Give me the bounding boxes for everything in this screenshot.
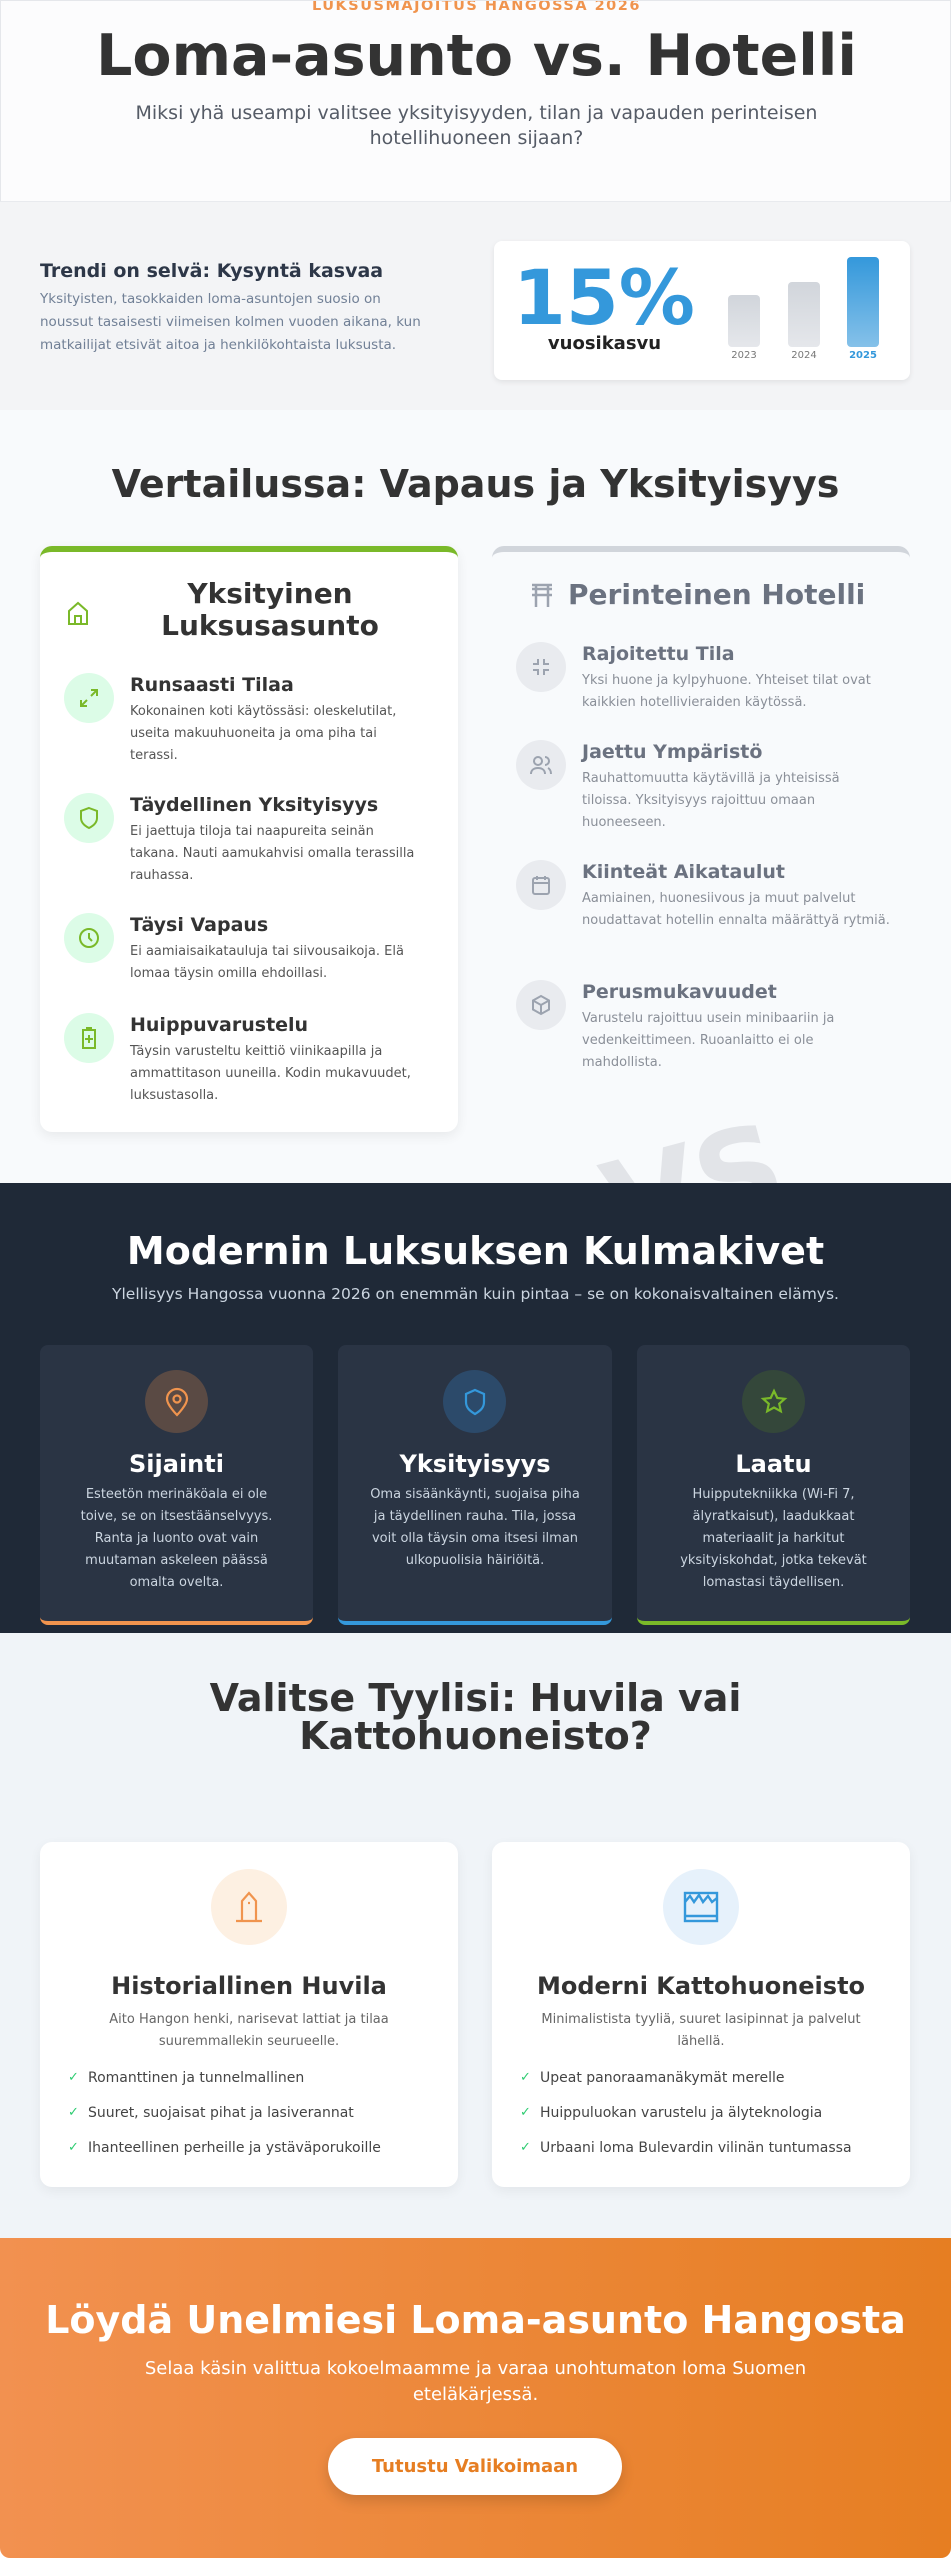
item: schedules: Kiinteät Aikataulut	[582, 861, 785, 883]
item: freedom	[64, 913, 404, 981]
header section	[0, 0, 951, 202]
dark section: cornerstones	[0, 1183, 951, 1633]
CTA text: Selaa käsin valittua kokoelmaamme ja varaa unohtumaton loma Suomen eteläkärjessä.	[145, 2358, 806, 2405]
CTA button	[328, 2438, 622, 2495]
checklist: ✓	[68, 2070, 79, 2085]
checklist	[520, 2070, 852, 2156]
section title: Vertailussa: Vapaus ja Yksityisyys	[112, 462, 839, 506]
panel title with icon: Perinteinen Hotelli	[568, 578, 865, 611]
CTA section	[0, 2238, 951, 2558]
item: freedom: Täysi Vapaus	[130, 914, 268, 936]
checklist: Urbaani loma Bulevardin vilinän tuntumassa	[540, 2140, 852, 2156]
bar chart: 2023	[731, 350, 757, 361]
checklist: ✓	[520, 2105, 531, 2120]
checklist: ✓	[520, 2070, 531, 2085]
icon: window	[663, 1869, 739, 1945]
item: equipment: Täysin varusteltu keittiö viinikaapilla ja ammattitason uuneilla. Kodin mukavuudet, luksustasolla.	[130, 1044, 411, 1103]
trend text: Trendi on selvä: Kysyntä kasvaa	[40, 260, 383, 282]
bar chart: 2024	[791, 350, 817, 361]
card: historic villa	[40, 1842, 458, 2187]
card: privacy: Yksityisyys	[399, 1450, 551, 1478]
card: penthouse: Minimalistista tyyliä, suuret lasipinnat ja palvelut lähellä.	[541, 2012, 861, 2049]
item: freedom: Ei aamiaisaikatauluja tai siivousaikoja. Elä lomaa täysin omilla ehdoillasi.	[130, 944, 404, 981]
card: quality	[637, 1345, 910, 1625]
item: schedules	[516, 860, 890, 928]
item: limited space: Yksi huone ja kylpyhuone. Yhteiset tilat ovat kaikkien hotellivieraiden käytössä.	[582, 673, 871, 710]
checklist: Upeat panoraamanäkymät merelle	[540, 2070, 785, 2086]
checklist	[68, 2070, 381, 2156]
card: privacy: Oma sisäänkäynti, suojaisa piha ja täydellinen rauha. Tila, jossa voit olla täysin oma itsesi ilman ulkopuolisia häiriöitä.	[370, 1487, 580, 1568]
item: basic amenities: Varustelu rajoittuu usein minibaariin ja vedenkeittimeen. Ruoanlaitto ei ole mahdollista.	[582, 1011, 834, 1070]
stat label: vuosikasvu	[548, 333, 661, 354]
checklist: Ihanteellinen perheille ja ystäväporukoille	[88, 2140, 381, 2156]
section subtitle: Ylellisyys Hangossa vuonna 2026 on enemmän kuin pintaa – se on kokonaisvaltainen elämys.	[112, 1285, 839, 1303]
card: location	[40, 1345, 313, 1625]
item: privacy: Ei jaettuja tiloja tai naapureita seinän takana. Nauti aamukahvisi omalla terassilla rauhassa.	[130, 824, 414, 883]
icon: tower	[211, 1869, 287, 1945]
trend text	[40, 260, 421, 353]
trend text: Yksityisten, tasokkaiden loma-asuntojen suosio on noussut tasaisesti viimeisen kolmen vuoden aikana, kun matkailijat etsivät aitoa ja henkilökohtaista luksusta.	[40, 291, 421, 353]
item: space	[64, 673, 396, 763]
item: limited space	[516, 642, 871, 710]
stat card	[494, 241, 910, 380]
trend section	[0, 202, 951, 410]
item: space: Runsaasti Tilaa	[130, 674, 294, 696]
card: quality: Laatu	[735, 1450, 812, 1478]
item: equipment: Huippuvarustelu	[130, 1014, 308, 1036]
item: limited space: Rajoitettu Tila	[582, 643, 735, 665]
checklist: Huippuluokan varustelu ja älyteknologia	[540, 2104, 822, 2120]
card: historic villa: Historiallinen Huvila	[111, 1972, 387, 2000]
item: schedules: Aamiainen, huonesiivous ja muut palvelut noudattavat hotellin ennalta määrättyä rytmiä.	[582, 891, 890, 928]
bar chart: 2025	[849, 350, 877, 361]
checklist: ✓	[68, 2105, 79, 2120]
card: historic villa: Aito Hangon henki, narisevat lattiat ja tilaa suuremmallekin seurueelle.	[109, 2012, 389, 2049]
checklist: Romanttinen ja tunnelmallinen	[88, 2070, 304, 2086]
main title: Loma-asunto vs. Hotelli	[96, 23, 857, 89]
item: space: Kokonainen koti käytössäsi: oleskelutilat, useita makuuhuoneita ja oma piha tai terassi.	[130, 704, 396, 763]
panel: traditional hotel	[492, 546, 910, 1106]
card: location: Esteetön merinäköala ei ole toive, se on itsestäänselvyys. Ranta ja luonto ovat vain muutaman askeleen päässä omalta ovelta.	[81, 1487, 272, 1590]
item: privacy: Täydellinen Yksityisyys	[130, 794, 378, 816]
card: location: Sijainti	[129, 1450, 224, 1478]
item: shared	[516, 740, 840, 830]
panel: private villa	[40, 546, 458, 1132]
item: equipment	[64, 1013, 411, 1103]
comparison section	[0, 410, 951, 1183]
item: basic amenities: Perusmukavuudet	[582, 981, 777, 1003]
checklist: ✓	[68, 2140, 79, 2155]
item: basic amenities	[516, 980, 834, 1070]
checklist: ✓	[520, 2140, 531, 2155]
style section	[0, 1633, 951, 2238]
card: penthouse	[492, 1842, 910, 2187]
card: quality: Huipputekniikka (Wi-Fi 7, älyratkaisut), laadukkaat materiaalit ja harkitut yksityiskohdat, jotka tekevät lomastasi täydellisen.	[680, 1487, 867, 1590]
section title: Modernin Luksuksen Kulmakivet	[127, 1229, 824, 1273]
CTA title: Löydä Unelmiesi Loma-asunto Hangosta	[45, 2298, 906, 2342]
section title: Valitse Tyylisi: Huvila vai Kattohuoneisto?	[210, 1676, 741, 1758]
checklist: Suuret, suojaisat pihat ja lasiverannat	[88, 2104, 354, 2120]
item: shared: Jaettu Ympäristö	[582, 741, 762, 763]
icon: house	[68, 602, 88, 625]
card: privacy	[338, 1345, 612, 1625]
CTA button: Tutustu Valikoimaan	[372, 2456, 578, 2477]
bar chart	[728, 257, 879, 361]
subtitle: Miksi yhä useampi valitsee yksityisyyden, tilan ja vapauden perinteisen hotellihuoneen sijaan?	[136, 102, 817, 149]
card: penthouse: Moderni Kattohuoneisto	[537, 1972, 865, 2000]
item: privacy	[64, 793, 414, 883]
panel title: Yksityinen Luksusasunto	[161, 577, 379, 642]
item: shared: Rauhattomuutta käytävillä ja yhteisissä tiloissa. Yksityisyys rajoittuu omaan huoneeseen.	[582, 771, 840, 830]
big stat: 15%	[513, 253, 695, 342]
